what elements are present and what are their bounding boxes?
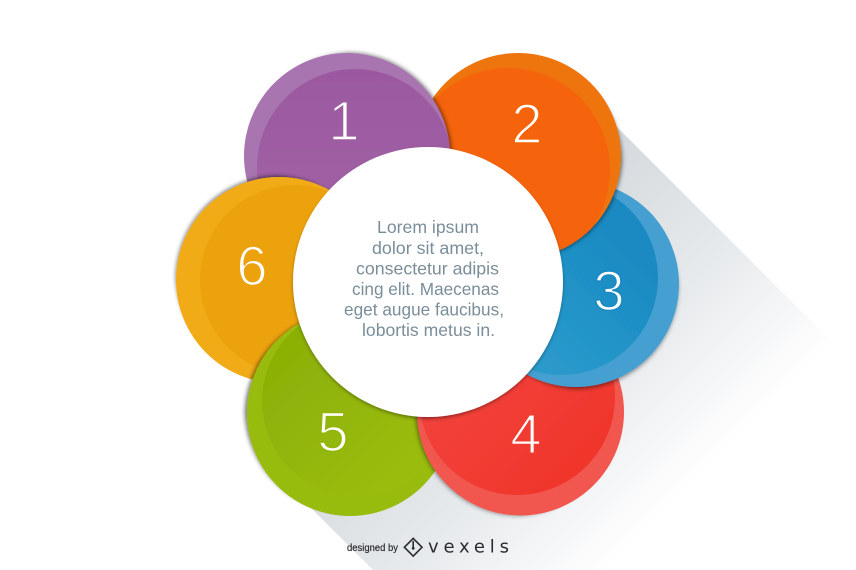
number 5: 5 [317,400,349,463]
designed by text: designed by [347,542,399,554]
center text block: lobortis metus in. [362,320,495,340]
circle 2: orange [432,53,626,254]
circle 5: green [242,321,436,516]
center text block: cing elit. Maecenas [352,279,499,299]
number 2: 2 [511,92,543,155]
center text block: Lorem ipsum [377,217,479,237]
yellow circle overlap on purple [246,173,330,190]
icon: vexels diamond [404,538,422,556]
center text block: eget augue faucibus, [344,300,504,320]
circle 4: red [414,374,624,518]
number 4: 4 [510,402,542,465]
center text block: consectetur adipis [356,258,499,278]
long diagonal shadow [300,120,856,570]
circle 6: yellow [172,177,329,380]
center text block [344,217,504,340]
circle 1: purple [244,50,454,190]
vexels attribution [347,536,509,558]
circle 3: blue [526,189,681,392]
vexels wordmark: vexels [428,536,509,558]
number 3: 3 [593,259,625,322]
center text block: dolor sit amet, [372,238,484,258]
center white circle [293,147,563,417]
number 6: 6 [236,234,268,297]
number 1: 1 [328,89,360,152]
